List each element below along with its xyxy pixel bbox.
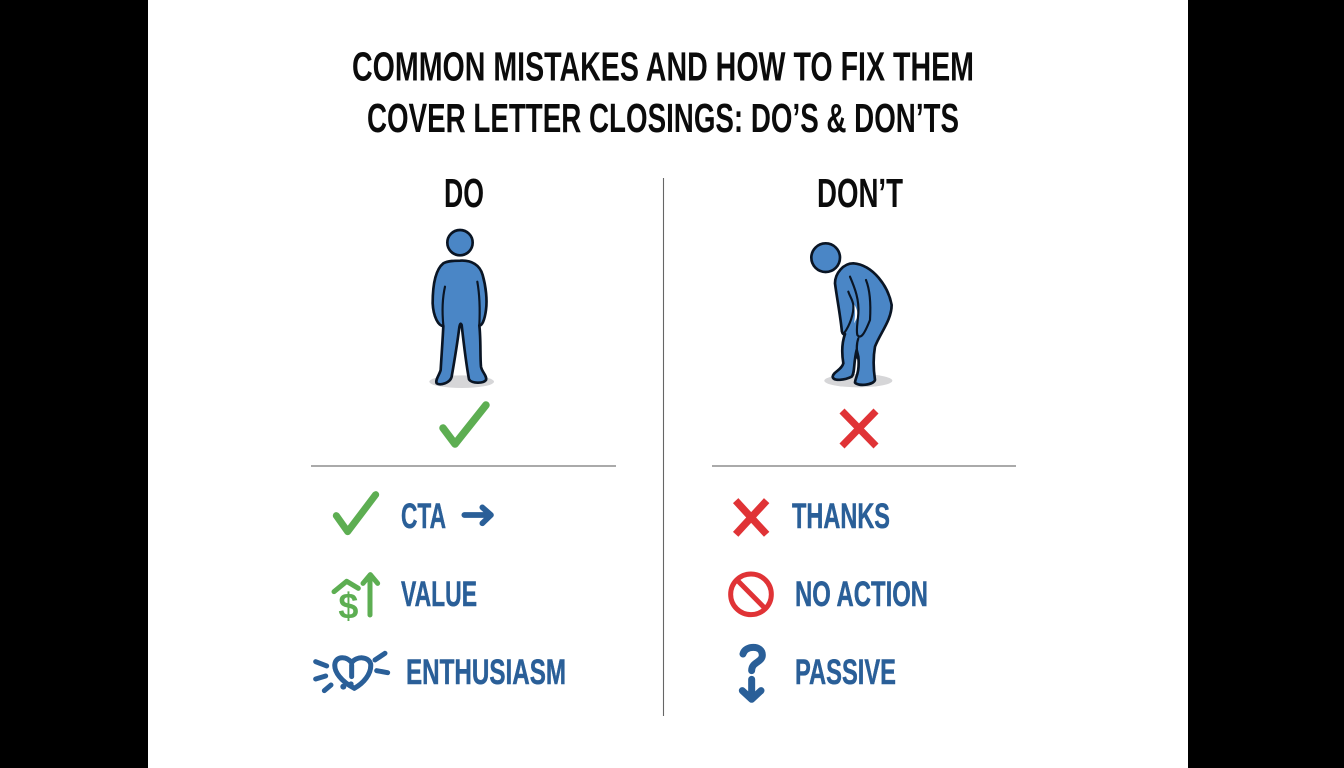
- heading: don't: DON’T: [817, 170, 903, 216]
- icon: arrow right: [464, 507, 491, 523]
- icon: standing figure: [429, 230, 494, 388]
- icon: heart with exclamation: [316, 653, 388, 691]
- item: thanks: [736, 497, 890, 536]
- item: passive: [742, 647, 896, 699]
- icon: large check mark: [443, 405, 486, 444]
- item: enthusiasm: [316, 653, 566, 692]
- item: no action: [731, 574, 928, 615]
- title: COVER LETTER CLOSINGS: DO’S & DON’TS: [367, 95, 959, 141]
- title: COMMON MISTAKES AND HOW TO FIX THEM: [352, 44, 974, 90]
- icon: prohibition sign: [731, 574, 771, 615]
- item: enthusiasm: ENTHUSIASM: [406, 653, 566, 692]
- panel: do: [311, 170, 616, 692]
- item: thanks: THANKS: [792, 497, 890, 536]
- item: value: VALUE: [401, 575, 477, 614]
- panel: don't: [712, 170, 1016, 699]
- item: passive: PASSIVE: [795, 653, 896, 692]
- icon: dollar with up arrow: $: [338, 586, 358, 627]
- title: [352, 44, 974, 141]
- icon: question mark with down arrow: [742, 647, 762, 699]
- item: value: [334, 575, 477, 627]
- item: CTA: CTA: [401, 497, 446, 536]
- item: CTA: [336, 495, 491, 536]
- icon: cross: [736, 501, 767, 534]
- icon: slumped figure: [811, 243, 892, 387]
- icon: dollar with up arrow: [334, 575, 378, 627]
- icon: check: [336, 495, 376, 532]
- heading: do: DO: [444, 170, 484, 216]
- icon: large red cross: [842, 411, 876, 446]
- item: no action: NO ACTION: [795, 575, 928, 614]
